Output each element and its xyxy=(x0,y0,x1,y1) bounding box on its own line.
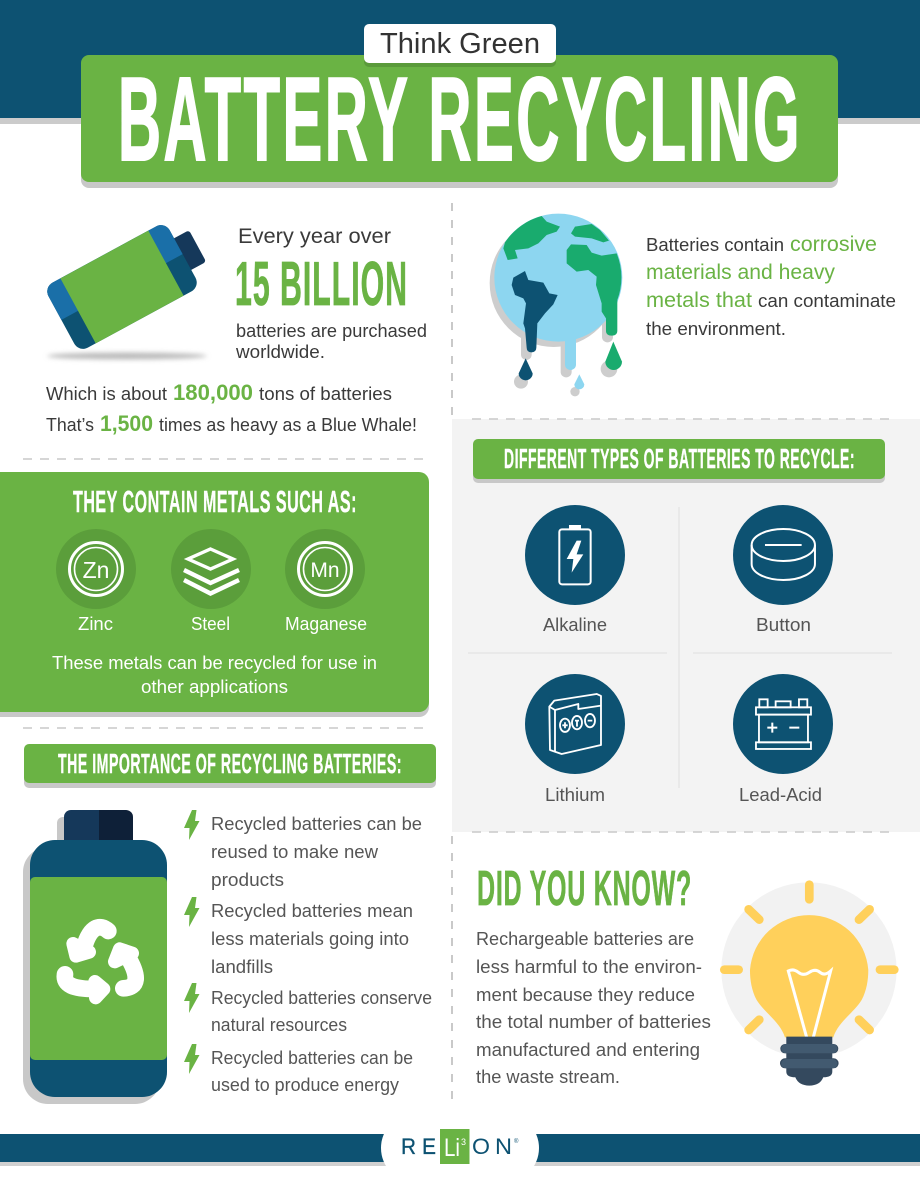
reason 4: used to produce energy xyxy=(211,1075,399,1095)
icon: steel xyxy=(171,529,251,634)
metals heading: THEY CONTAIN METALS SUCH AS: xyxy=(73,484,357,519)
stat: tons and whale: That’s xyxy=(46,415,94,435)
reason 4 xyxy=(184,1044,413,1095)
footer band xyxy=(0,1113,920,1183)
type: button: Button xyxy=(756,615,811,635)
did you know heading: DID YOU KNOW? xyxy=(477,862,692,916)
stat: tons and whale: 180,000 xyxy=(173,380,253,405)
icon: manganese: Maganese xyxy=(285,614,367,634)
icon: manganese xyxy=(285,529,367,634)
type: lithium xyxy=(525,674,625,805)
did you know text xyxy=(476,862,711,1087)
panel: metals xyxy=(0,472,429,717)
type: lead-acid: Lead-Acid xyxy=(739,785,822,805)
icon: melting globe xyxy=(490,214,622,396)
logo: Relion: E xyxy=(422,1134,436,1159)
icon: recycling battery xyxy=(23,810,167,1104)
text: corrosive materials xyxy=(646,233,896,339)
stat: 15 billion: batteries are purchased xyxy=(236,321,427,341)
reason 1: reused to make new xyxy=(211,842,379,862)
stat: tons and whale xyxy=(46,380,417,436)
metals note xyxy=(52,653,377,697)
icon: steel: Steel xyxy=(191,614,230,634)
reason 1 xyxy=(184,810,422,890)
did you know text: manufactured and entering xyxy=(476,1040,700,1060)
reason 3: Recycled batteries conserve xyxy=(211,988,432,1008)
logo: Relion xyxy=(401,1129,519,1164)
list: reasons xyxy=(184,810,432,1095)
types heading xyxy=(473,439,885,483)
text: corrosive materials: can contaminate xyxy=(758,291,896,311)
icon: zinc: Zinc xyxy=(78,614,113,634)
reason 2: landfills xyxy=(211,957,273,977)
recycling symbol xyxy=(65,927,136,998)
reason 2 xyxy=(184,897,413,977)
metals note: other applications xyxy=(141,677,288,697)
heading: importance: THE IMPORTANCE OF RECYCLING BATTERIES: xyxy=(58,748,402,779)
icon: zinc: Zn xyxy=(83,557,109,583)
stat: tons and whale: tons of batteries xyxy=(259,384,392,404)
stat: 15 billion xyxy=(235,225,427,362)
reason 2: Recycled batteries mean xyxy=(211,901,413,921)
text: corrosive materials: materials and heavy xyxy=(646,261,835,284)
panel: battery types xyxy=(452,419,920,832)
type: lead-acid xyxy=(733,674,833,805)
did you know text: ment because they reduce xyxy=(476,985,695,1005)
icon: manganese: Mn xyxy=(310,559,340,582)
stat: 15 billion: worldwide. xyxy=(235,342,325,362)
subtitle tag: Think Green xyxy=(380,28,540,60)
logo: Relion: R xyxy=(401,1134,416,1159)
did you know text: Rechargeable batteries are xyxy=(476,929,694,949)
reason 2: less materials going into xyxy=(211,929,409,949)
heading: importance xyxy=(24,744,436,788)
logo: Relion: O xyxy=(472,1134,490,1159)
type: alkaline: Alkaline xyxy=(543,615,607,635)
metals note: These metals can be recycled for use in xyxy=(52,653,377,673)
title banner xyxy=(81,53,838,188)
type: lithium: Lithium xyxy=(545,785,605,805)
did you know text: less harmful to the environ- xyxy=(476,957,702,977)
reason 4: Recycled batteries can be xyxy=(211,1048,413,1068)
type: button xyxy=(733,505,833,635)
did you know text: the waste stream. xyxy=(476,1067,620,1087)
reason 1: products xyxy=(211,870,284,890)
logo: Relion: ® xyxy=(514,1138,519,1145)
vertical divider xyxy=(451,203,453,1100)
text: corrosive materials: Batteries contain xyxy=(646,235,784,255)
icon: light bulb xyxy=(721,882,897,1086)
reason 1: Recycled batteries can be xyxy=(211,814,422,834)
text: corrosive materials: corrosive xyxy=(790,233,877,256)
stat: 15 billion: 15 BILLION xyxy=(235,250,408,319)
text: corrosive materials: the environment. xyxy=(646,319,786,339)
logo: Relion: 3 xyxy=(461,1137,466,1147)
icon: zinc xyxy=(56,529,136,634)
did you know text: the total number of batteries xyxy=(476,1012,711,1032)
subtitle tag xyxy=(364,24,556,67)
logo: Relion: N xyxy=(495,1134,512,1159)
header band xyxy=(0,0,920,124)
stat: tons and whale: times as heavy as a Blue Whale! xyxy=(159,415,417,435)
stat: tons and whale: 1,500 xyxy=(100,411,153,436)
text: corrosive materials: metals that xyxy=(646,289,752,312)
reason 3: natural resources xyxy=(211,1015,347,1035)
icon: tilted battery xyxy=(44,213,215,360)
type: alkaline xyxy=(525,505,625,635)
stat: 15 billion: Every year over xyxy=(238,225,391,248)
reason 3 xyxy=(184,983,432,1035)
logo: Relion: Li xyxy=(444,1134,460,1162)
stat: tons and whale: Which is about xyxy=(46,384,167,404)
